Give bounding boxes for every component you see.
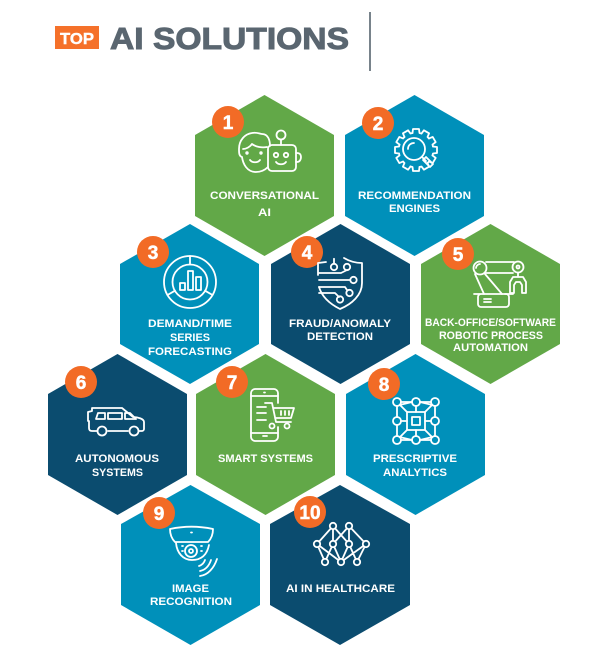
icon: car [88,408,144,436]
icon: circuit shield [318,258,362,309]
icon: ring chart with bars [164,256,216,308]
badge 6 [65,366,97,398]
badge 5: 5 [453,245,464,266]
icon: dome camera [170,527,217,576]
icon: chip network [393,398,439,444]
label: RECOMMENDATION [358,190,471,202]
badge 1: 1 [223,113,234,134]
label: DEMAND/TIME [148,318,232,330]
icon: robot arm [474,262,526,307]
label: AUTOMATION [453,342,528,354]
top tag: TOP [60,31,94,48]
panel: image recognition [121,485,260,645]
panel: smart systems [196,354,335,515]
label: AI IN HEALTHCARE [286,583,395,595]
label [210,190,319,219]
panel: conversational ai [195,95,334,256]
label [373,453,457,479]
badge 2 [362,107,394,139]
badge 8 [368,368,400,400]
label [148,318,232,358]
label: AI [258,207,271,219]
label: RECOGNITION [150,596,232,608]
label: FORECASTING [148,346,232,358]
panel: autonomous systems [48,354,187,515]
label: ENGINES [389,203,440,215]
label [425,317,556,354]
label: FRAUD/ANOMALY [289,318,392,330]
label: PRESCRIPTIVE [373,453,457,465]
badge 7: 7 [227,373,237,394]
label: ANALYTICS [383,467,447,479]
header [55,21,349,56]
icon: human and robot faces [239,130,301,172]
badge 8: 8 [379,375,389,396]
label: IMAGE [172,583,209,595]
badge 2: 2 [373,114,383,135]
icon: phone with cart [251,389,294,441]
panel: ai in healthcare [270,485,410,645]
badge 5 [442,238,474,270]
panel: demand forecasting [120,224,259,384]
label [358,190,471,215]
badge 10: 10 [299,503,321,524]
panel: fraud detection [271,224,410,384]
top tag [55,26,99,49]
title: AI SOLUTIONS [110,21,349,56]
label: AUTONOMOUS [75,453,159,465]
label [150,583,232,608]
label: CONVERSATIONAL [210,190,319,202]
badge 4 [291,236,323,268]
label: ROBOTIC PROCESS [439,330,543,342]
panel: prescriptive analytics [346,354,485,515]
badge 4: 4 [302,243,313,264]
panel: recommendation engines [345,95,484,256]
badge 10 [294,496,326,528]
badge 7 [216,366,248,398]
label: SYSTEMS [92,467,143,479]
label: SERIES [170,332,210,344]
badge 6: 6 [76,373,86,394]
label [75,453,159,479]
label: BACK-OFFICE/SOFTWARE [425,317,556,329]
badge 1 [212,106,244,138]
badge 9: 9 [154,504,164,525]
label: DETECTION [307,331,373,343]
icon: neural network [314,523,369,565]
badge 9 [143,497,175,529]
panel: robotic process automation [421,224,560,384]
label: SMART SYSTEMS [218,453,313,465]
label [289,318,392,343]
badge 3: 3 [148,243,158,264]
icon: gear with magnifier [395,129,437,171]
badge 3 [137,236,169,268]
